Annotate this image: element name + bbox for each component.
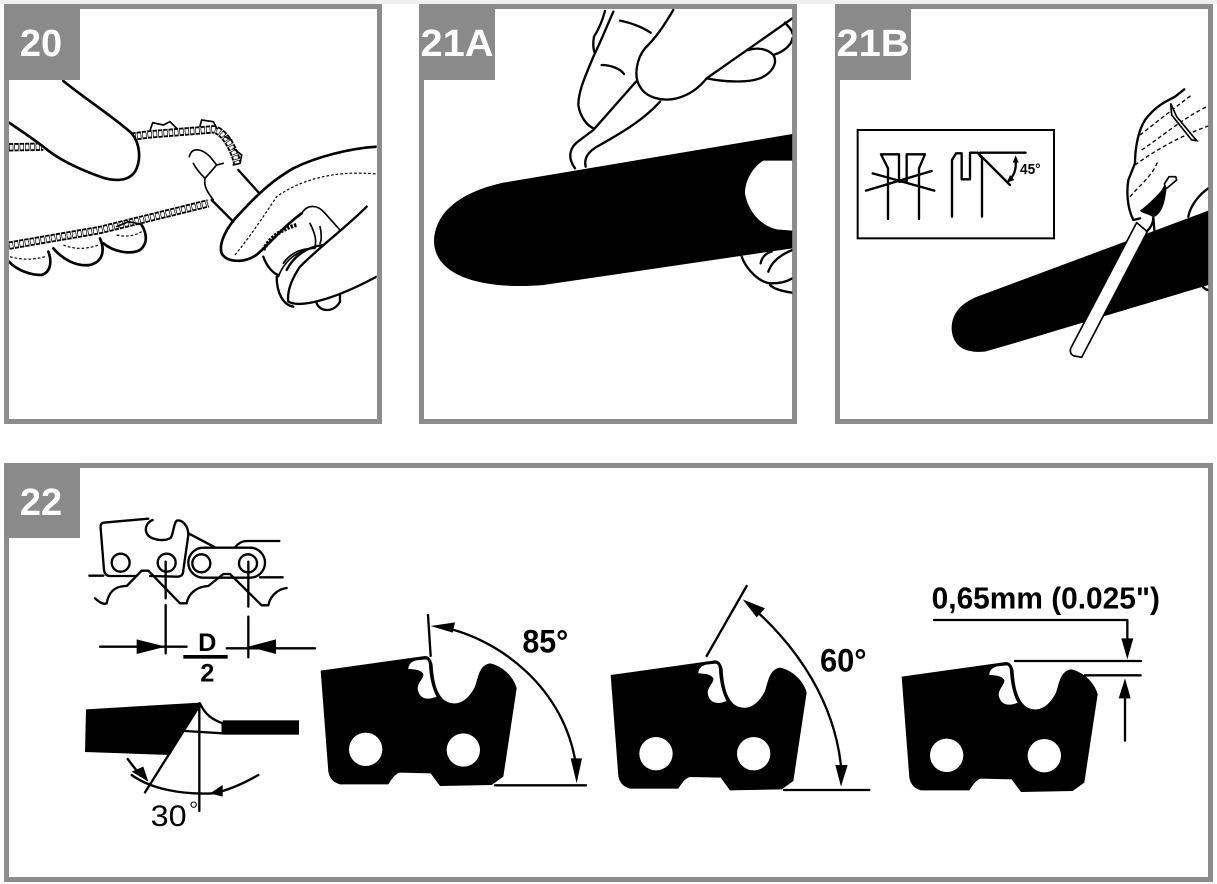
chain side view with D/2 dimension: 2 [200,660,214,688]
label 21A [419,4,495,80]
inset: correct and incorrect filing angle [858,130,1054,238]
chain side view with D/2 dimension [89,519,315,688]
panel 21A frame [422,6,794,422]
45 degree arc [1009,160,1016,180]
label 20: 20 [20,23,62,65]
label 21A: 21A [420,23,494,65]
panel 20 frame [6,6,380,422]
label 20 [4,4,80,80]
panel: 20 cleaning the chain bar [4,4,380,422]
panel 21B frame [838,6,1210,422]
panel 22 frame [6,466,1210,880]
tooth with 60 degree angle [611,586,869,790]
panel 21B illustration: hand, file and bar [952,89,1208,357]
panel: 21B file at 45 degrees [835,4,1210,422]
30 degree label: 30 [151,800,187,833]
label 85 degrees: 85° [522,624,568,660]
panel 20 illustration: hands holding bar and chain [9,81,377,310]
correct profile [952,153,1026,217]
label 21B: 21B [836,23,910,65]
dimension label: 0,65mm (0.025") [932,581,1160,615]
tooth with 85 degree angle [321,615,586,786]
panel 21A illustration: fingers and black bar [434,10,792,293]
tooth with 0.65mm depth gauge [902,581,1160,792]
panel: 21A checking the bar [419,4,794,422]
30 degree top-plate angle [85,703,299,833]
label 60 degrees: 60° [820,643,867,679]
panel: 22 chain tooth angles [4,463,1210,880]
label 21B [835,4,911,80]
label 22: 22 [20,482,62,524]
label 22 [4,463,80,538]
D over 2: D [198,629,216,657]
45 degree label: 45° [1020,162,1041,178]
wrong profile, crossed out [866,154,934,219]
